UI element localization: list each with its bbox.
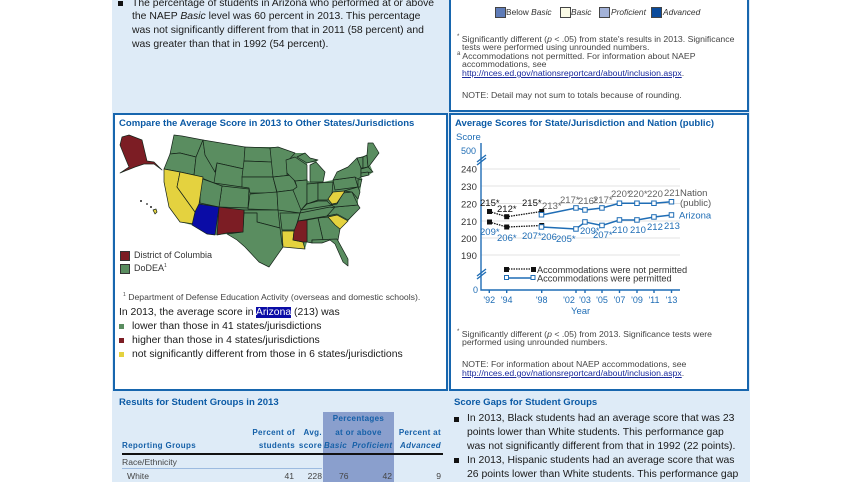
table: student groups: 41 [284,471,294,481]
chart footnotes: performed using unrounded numbers. [462,337,607,347]
text block: Basic level bullet: was greater than that in 1992 (54 percent). [132,39,328,50]
table: student groups: at or above [335,428,382,437]
series: nation: 213* [542,201,562,212]
text block: gap bullets: In 2013, Hispanic students had an average score that was [467,455,734,466]
text block: gap bullets: points lower than White students. This performance gap [467,427,724,438]
heading: results: Results for Student Groups in 2013 [119,397,279,408]
series: nation: Nation [680,188,707,199]
line chart: scores by year [456,132,712,317]
text block: gap bullets: was not significantly different from that in 1992 (22 points). [467,441,735,452]
table: student groups: Percent at [399,428,441,437]
line chart: scores by year: 220 [461,200,477,210]
line chart: scores by year: 210 [461,217,477,228]
series: Arizona: 209* [480,227,500,238]
chart footnotes: http://nces.ed.gov/nationsreportcard/about/inclusion.aspx. [462,368,684,378]
text block: score comparison [119,307,403,360]
text block: gap bullets [454,413,738,480]
heading: compare: Compare the Average Score in 2013 to Other States/Jurisdictions [119,118,414,129]
chart legend [504,265,687,284]
text block: score comparison: not significantly different from those in 6 states/jurisdictions [132,349,403,360]
legend: achievement levels: Below Basic [506,7,552,17]
text block: gap bullets: 26 points lower than White students. This performance gap [467,469,738,480]
series: nation: 217* [560,195,580,206]
series: nation: 215* [522,198,542,209]
series: Arizona: 213 [664,221,680,232]
line chart: scores by year: '02 [563,295,575,305]
footnotes [457,34,734,100]
text block: gap bullets: In 2013, Black students had an average score that was 23 [467,413,734,424]
series: Arizona: 209* [580,226,600,237]
series: nation: 221 [664,188,680,199]
axis labels: Score [456,132,481,143]
table: student groups: White [127,471,149,481]
legend: achievement levels [495,7,700,18]
table: student groups: 9 [436,471,441,481]
axis labels: 0 [473,285,478,295]
table: student groups: 42 [382,471,392,481]
page background band [112,0,750,482]
text block: Basic level bullet: the NAEP Basic level was 60 percent in 2013. This percentage [132,11,420,22]
legend: achievement levels: Basic [571,7,591,17]
series: nation: 212* [497,204,517,215]
series: Arizona: 210 [630,225,646,236]
table: student groups: Avg. [304,428,322,437]
footnotes: accommodations, see [462,59,547,69]
series: nation: 220 [647,189,663,200]
axis labels [456,132,590,317]
series: Arizona: 205* [556,234,576,245]
series: Arizona: 206 [541,232,557,243]
heading: average scores: Average Scores for State/Jurisdiction and Nation (public) [455,118,714,129]
table: student groups: 228 [308,471,322,481]
map legend: DoDEA1 [134,263,167,273]
chart footnotes [457,328,712,378]
legend: achievement levels: Proficient [611,7,646,17]
panel: achievement level legend and notes [449,0,749,112]
table: student groups: Reporting Groups [122,441,196,450]
line chart: scores by year: '94 [501,295,513,305]
table: student groups [122,412,443,482]
footnotes: tests were performed using unrounded numbers. [462,42,649,52]
series: Arizona: Arizona [679,210,712,222]
series: Arizona: 206* [497,233,517,244]
table: student groups: 76 [339,471,349,481]
legend: achievement levels: Advanced [663,7,700,17]
line chart: scores by year: '03 [579,295,591,305]
series: nation: 215* [480,198,500,209]
map legend: District of Columbia [134,250,212,260]
chart footnotes: * Significantly different (p < .05) from 2013. Significance tests were [457,329,712,339]
chart legend: Accommodations were permitted [537,274,672,284]
map footnote: 1 Department of Defense Education Activity (overseas and domestic schools). [123,292,420,302]
table: student groups: Basic [324,441,347,450]
line chart: scores by year: 240 [461,164,477,176]
panel: average scores trend [449,113,749,391]
text block: score comparison: lower than those in 41 states/jurisdictions [132,321,321,332]
series: nation: 220* [611,189,631,200]
series: Arizona: 212 [647,222,663,233]
table: student groups: Percent of [252,428,295,437]
line chart: scores by year: '92 [483,295,495,305]
panel: compare average score map [113,113,448,391]
line chart: scores by year: '98 [536,295,548,305]
series: Arizona: 207* [522,231,542,242]
text block: Basic level bullet [118,0,434,50]
table: student groups: Proficient [352,441,392,450]
chart footnotes: NOTE: For information about NAEP accommodations, see [462,359,686,369]
line chart: scores by year: '05 [596,295,608,305]
axes [477,143,680,293]
panel: results for student groups [119,397,443,482]
axis labels: Year [571,306,590,317]
text block: score comparison: In 2013, the average score in Arizona (213) was [119,307,340,318]
footnotes: a Accommodations not permitted. For information about NAEP [457,51,696,61]
map legend [120,250,212,274]
table: student groups: Advanced [400,441,441,450]
table: student groups: students [259,441,295,450]
footnotes: http://nces.ed.gov/nationsreportcard/about/inclusion.aspx. [462,68,684,78]
series: nation [480,188,711,219]
text block: score comparison: higher than those in 4 states/jurisdictions [132,335,320,346]
chart legend: Accommodations were not permitted [537,265,687,275]
line chart: scores by year: 200 [461,234,477,245]
series: Arizona: 207* [593,230,613,241]
table: student groups: score [299,441,322,450]
line chart: scores by year: '09 [631,295,643,305]
line chart: scores by year: '07 [614,295,625,305]
footnotes: NOTE: Detail may not sum to totals because of rounding. [462,90,682,100]
heading: score gaps: Score Gaps for Student Groups [454,397,597,408]
series: nation: 217* [593,195,613,206]
series: nation: (public) [680,198,711,209]
text block: Basic level bullet: was not significantly different from that in 2011 (58 percent) and [132,25,424,36]
panel: score gaps [454,397,738,480]
line chart: scores by year: 190 [461,251,477,262]
footnotes: * Significantly different (p < .05) from state's results in 2013. Significance [457,34,734,44]
map: US states comparison [120,134,380,268]
series: nation: 220* [628,189,648,200]
line chart: scores by year: '13 [666,295,677,305]
series: Arizona: 210 [612,225,628,236]
line chart: scores by year: '11 [648,295,660,305]
series: nation: 216* [578,196,598,207]
table: student groups: Race/Ethnicity [122,457,177,467]
table: student groups: Percentages [333,414,384,423]
series: Arizona [480,210,712,245]
line chart: scores by year: 230 [461,182,477,193]
axis labels: 500 [461,146,476,156]
